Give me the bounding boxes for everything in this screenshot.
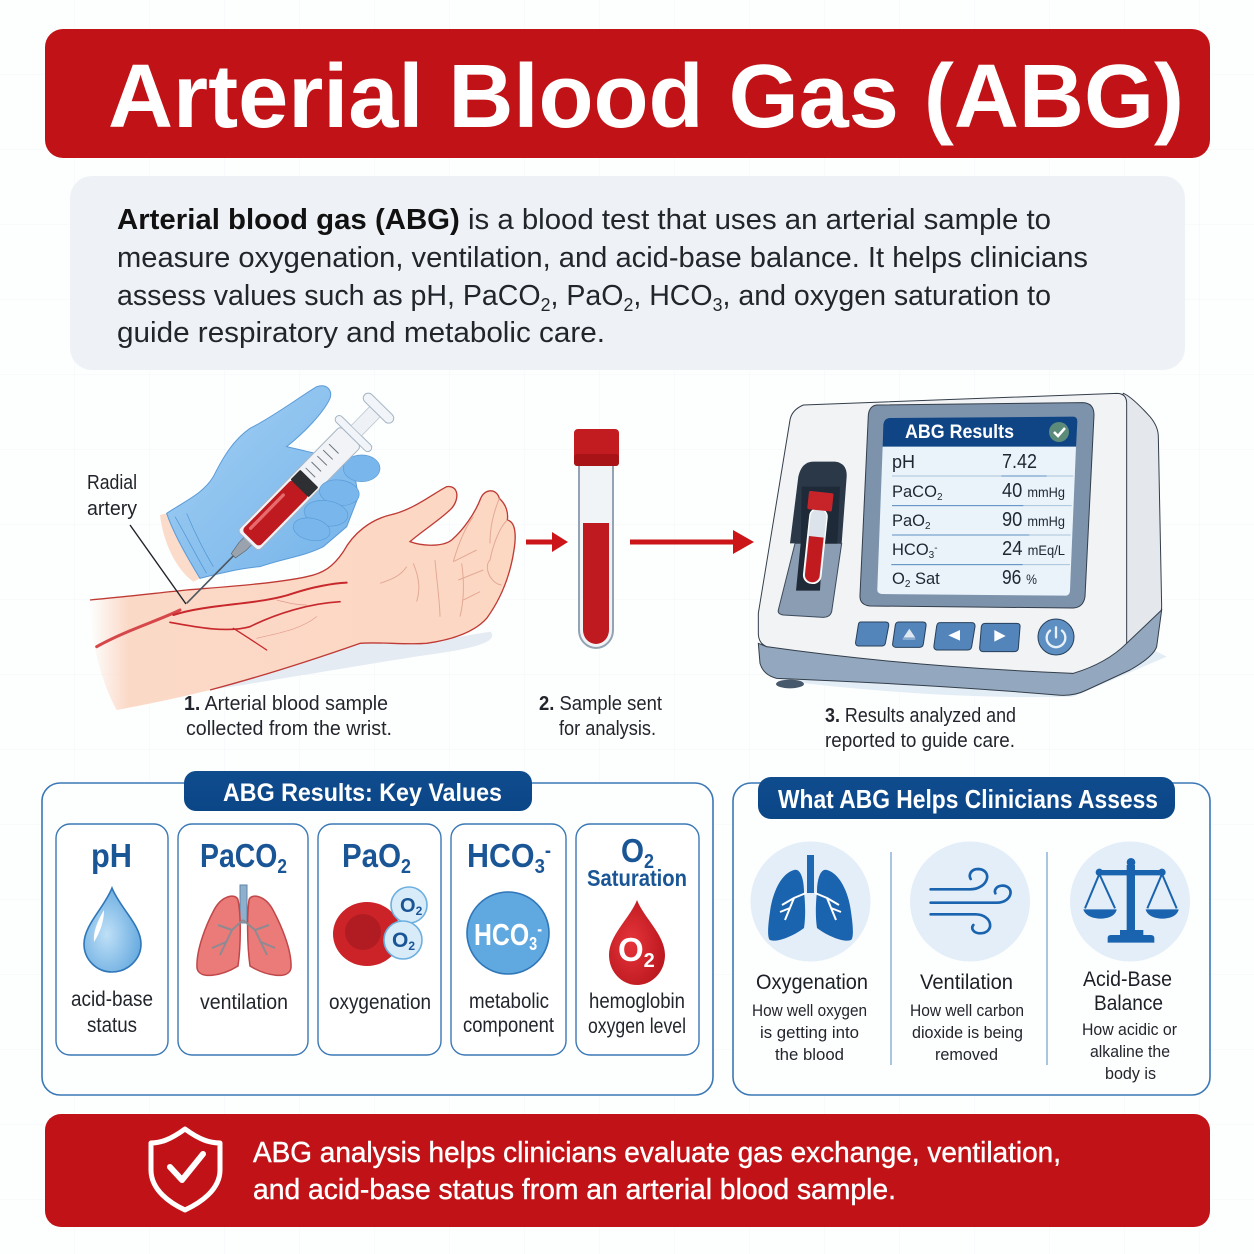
analyzer screen text: pH <box>892 452 915 472</box>
icon: oxygenated blood drop <box>609 900 665 985</box>
footer banner <box>45 1114 1210 1227</box>
step 2 caption: 2. Sample sent <box>539 693 662 715</box>
card: O2 saturation: 2 <box>644 851 654 873</box>
column: oxygenation: the blood <box>775 1045 844 1064</box>
illustration: blood gas analyzer <box>758 393 1167 697</box>
illustration: arterial sample from the wrist <box>90 386 515 710</box>
analyzer screen text: Sat <box>910 570 940 588</box>
icon: bicarbonate circle: 3 <box>529 934 537 954</box>
card: O2 saturation <box>576 824 699 1055</box>
column: acid-base balance: Balance <box>1094 992 1163 1015</box>
icon: red blood cell with oxygen: O <box>392 929 408 952</box>
gloved fingers <box>291 477 361 544</box>
card: HCO3: - <box>545 840 551 862</box>
arteries <box>97 583 347 650</box>
analyzer screen text: HCO <box>892 541 929 559</box>
step 3 caption <box>825 705 1016 752</box>
card: O2 saturation: O <box>621 832 647 869</box>
icon: bicarbonate circle: - <box>537 919 542 939</box>
analyzer screen text: 2 <box>937 492 943 503</box>
analyzer screen text: 2 <box>905 579 911 590</box>
column: ventilation: dioxide is being <box>912 1023 1023 1042</box>
card: O2 saturation: hemoglobin <box>589 990 685 1013</box>
card: HCO3: 3 <box>535 856 545 878</box>
card: PaCO2: ventilation <box>200 991 288 1014</box>
card: O2 saturation: Saturation <box>587 865 687 891</box>
panel: definition: guide respiratory and metabolic care. <box>117 317 605 349</box>
panel: definition: assess values such as pH, PaCO <box>117 280 547 312</box>
panel: definition: , HCO <box>633 280 713 312</box>
column: ventilation: How well carbon <box>910 1001 1024 1020</box>
title banner: Arterial Blood Gas (ABG) <box>108 47 1184 147</box>
column: acid-base balance: Acid-Base <box>1083 968 1172 991</box>
card: pH: pH <box>91 837 132 874</box>
analyzer screen text <box>892 422 1069 590</box>
column: oxygenation <box>750 842 870 1064</box>
card: pH <box>56 824 168 1055</box>
icon: oxygenated blood drop: 2 <box>644 950 655 972</box>
column: oxygenation: How well oxygen <box>752 1001 867 1020</box>
card: PaCO2 <box>178 824 308 1055</box>
icon: water drop <box>84 888 141 972</box>
card: PaO2 <box>318 824 441 1055</box>
syringe <box>170 388 399 620</box>
panel: definition: Arterial blood gas (ABG) is a blood test that uses an arterial sample to <box>117 204 1051 236</box>
icon: bicarbonate circle: HCO <box>474 917 543 952</box>
analyzer screen text: 96 % <box>1002 567 1037 589</box>
arrow: sample to tube <box>526 532 568 552</box>
card: HCO3 <box>451 824 566 1055</box>
column: ventilation: removed <box>935 1045 998 1064</box>
gloved hand <box>160 386 380 582</box>
sample port with tube <box>778 462 847 617</box>
label: radial artery: artery <box>87 498 137 520</box>
card: HCO3: metabolic <box>469 990 549 1013</box>
card: PaCO2: PaCO <box>200 837 290 874</box>
analyzer screen text: 24 mEq/L <box>1002 538 1065 560</box>
panel: what ABG assesses <box>733 777 1210 1095</box>
icon: wind <box>931 869 1011 933</box>
heading: key values <box>184 771 532 811</box>
icon: shield with check <box>151 1129 220 1210</box>
arrow: tube to analyzer <box>630 530 754 554</box>
footer banner: ABG analysis helps clinicians evaluate gas exchange, ventilation, <box>253 1137 1061 1169</box>
analyzer screen text: PaO <box>892 512 925 530</box>
heading: what ABG assesses: What ABG Helps Clinicians Assess <box>778 784 1158 814</box>
step 1 caption <box>184 693 392 740</box>
column: acid-base balance <box>1070 842 1190 1083</box>
arm and hand <box>90 487 515 710</box>
card: HCO3: HCO <box>467 837 540 874</box>
analyzer screen text: 90 mmHg <box>1002 509 1065 531</box>
panel: definition: 2 <box>623 295 633 315</box>
card: PaCO2: 2 <box>277 856 287 878</box>
analyzer screen text: 40 mmHg <box>1002 480 1065 502</box>
panel: key values <box>42 771 713 1095</box>
step 1 caption: 1. Arterial blood sample <box>184 693 388 715</box>
icon: red blood cell with oxygen: 2 <box>416 904 423 918</box>
panel: definition: , and oxygen saturation to <box>722 280 1051 312</box>
card: pH: acid-base <box>71 988 153 1011</box>
card: PaO2: 2 <box>401 856 411 878</box>
icon: oxygenated blood drop: O <box>618 931 644 968</box>
column: oxygenation: Oxygenation <box>756 971 868 994</box>
analyzer screen text: PaCO <box>892 483 937 501</box>
panel: definition <box>70 176 1185 370</box>
column: acid-base balance: How acidic or <box>1082 1020 1177 1039</box>
panel: definition: 2 <box>541 295 550 315</box>
card: PaO2: oxygenation <box>329 991 431 1014</box>
column: acid-base balance: body is <box>1105 1064 1156 1083</box>
column: ventilation <box>910 842 1030 1064</box>
card: O2 saturation: oxygen level <box>588 1015 686 1038</box>
column: ventilation: Ventilation <box>920 971 1013 994</box>
analyzer screen text: 7.42 <box>1002 451 1037 473</box>
icon: blood collection tube <box>574 429 619 648</box>
icon: red blood cell with oxygen: O <box>400 895 416 917</box>
step 1 caption: collected from the wrist. <box>186 718 392 740</box>
analyzer screen text: 2 <box>925 521 931 532</box>
column: oxygenation: is getting into <box>760 1023 859 1042</box>
icon: bicarbonate circle <box>467 892 549 974</box>
heading: what ABG assesses <box>758 777 1175 819</box>
icon: blue lungs <box>768 855 853 941</box>
analyzer screen text: O <box>892 570 905 588</box>
step 3 caption: 3. Results analyzed and <box>825 705 1016 727</box>
analyzer screen text: ABG Results <box>905 422 1014 443</box>
icon: red blood cell with oxygen <box>333 887 427 966</box>
analyzer body <box>758 393 1167 697</box>
footer banner: and acid-base status from an arterial blood sample. <box>253 1174 896 1206</box>
panel: definition: measure oxygenation, ventilation, and acid-base balance. It helps clinicians <box>117 242 1088 274</box>
label: radial artery <box>87 472 186 604</box>
panel: definition: , PaO <box>550 280 623 312</box>
icon: red blood cell with oxygen: 2 <box>408 939 415 953</box>
heading: key values: ABG Results: Key Values <box>223 779 502 807</box>
analyzer screen text: - <box>934 543 938 554</box>
display bezel and screen <box>860 403 1094 608</box>
step 3 caption: reported to guide care. <box>825 730 1015 752</box>
label: radial artery: Radial <box>87 472 137 494</box>
analyzer screen text: 3 <box>929 550 935 561</box>
step 2 caption <box>539 693 662 740</box>
control buttons <box>856 619 1074 655</box>
card: PaO2: PaO <box>342 837 408 874</box>
icon: balance scale <box>1083 858 1179 943</box>
step 2 caption: for analysis. <box>559 718 656 740</box>
panel: definition: 3 <box>713 295 722 315</box>
column: acid-base balance: alkaline the <box>1090 1042 1170 1061</box>
icon: lungs <box>197 885 291 975</box>
card: HCO3: component <box>463 1014 554 1037</box>
card: pH: status <box>87 1014 137 1037</box>
